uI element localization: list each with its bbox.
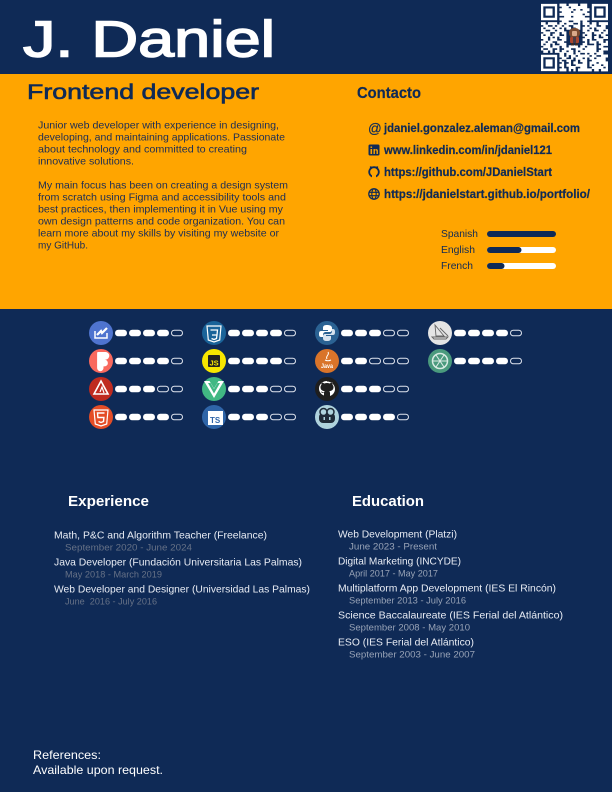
course 3: September 2013 - July 2016 xyxy=(349,596,466,606)
language: French: French xyxy=(441,260,473,272)
about text: best practices, then implementing it in Vue using my xyxy=(38,204,284,216)
education heading: Education xyxy=(352,494,424,510)
panel: education xyxy=(338,494,563,660)
skill: Java xyxy=(315,349,408,373)
panel: orange profile section xyxy=(0,74,612,309)
job title: Frontend developer xyxy=(27,81,259,104)
skill: GitHub xyxy=(315,377,408,401)
job 2 xyxy=(54,556,302,580)
skill: Java: Java xyxy=(321,364,334,370)
skill: JavaScript: JS xyxy=(210,358,219,368)
course 4 xyxy=(338,610,563,634)
references note: Available upon request. xyxy=(33,763,163,777)
course 3: Multiplatform App Development (IES El Rincón) xyxy=(338,582,556,594)
skill: Midjourney xyxy=(428,321,522,345)
about text: innovative solutions. xyxy=(38,156,134,168)
job 1: September 2020 - June 2024 xyxy=(65,542,192,554)
course 5: ESO (IES Ferial del Atlántico) xyxy=(338,636,474,648)
about text xyxy=(38,120,288,252)
references note: References: xyxy=(33,748,101,762)
job 3 xyxy=(54,584,310,608)
job 2: May 2018 - March 2019 xyxy=(65,570,162,580)
job 1 xyxy=(54,530,267,554)
contact list xyxy=(368,121,591,201)
about text: My main focus has been on creating a design system xyxy=(38,180,288,192)
about text: from scratch using Figma and accessibility tools and xyxy=(38,192,286,204)
skill: Python xyxy=(315,321,408,345)
panel: experience xyxy=(54,494,310,608)
skill: Angular-style xyxy=(89,377,182,401)
course 2 xyxy=(338,556,461,580)
name title: J. Daniel xyxy=(23,10,275,68)
skill: Figma xyxy=(89,349,182,373)
course 1 xyxy=(338,528,457,552)
skill: Excalidraw-style editor xyxy=(89,321,182,345)
language: English: English xyxy=(441,244,475,256)
about text: my GitHub. xyxy=(38,240,88,252)
course 1: Web Development (Platzi) xyxy=(338,528,457,540)
skill: TypeScript: TS xyxy=(210,416,221,425)
experience heading: Experience xyxy=(68,494,149,510)
references note xyxy=(33,748,163,777)
skill: GitHub Copilot xyxy=(315,405,408,429)
about text: developing, and maintaining applications. Passionate xyxy=(38,132,285,144)
skill: Vue xyxy=(202,377,296,401)
course 2: Digital Marketing (INCYDE) xyxy=(338,556,461,568)
panel: skills grid xyxy=(89,321,522,429)
job 2: Java Developer (Fundación Universitaria Las Palmas) xyxy=(54,556,302,568)
language: Spanish: Spanish xyxy=(441,228,478,240)
skill: HTML5 xyxy=(89,405,182,429)
QR code xyxy=(541,5,608,70)
about text: learn more about my skills by visiting my website or xyxy=(38,228,280,240)
skill: TypeScript xyxy=(202,405,296,429)
contact: linkedin: www.linkedin.com/in/jdaniel121 xyxy=(383,145,553,157)
job 3: June 2016 - July 2016 xyxy=(65,596,157,608)
about text: Junior web developer with experience in designing, xyxy=(38,120,279,132)
skill: CSS3 xyxy=(202,321,296,345)
about text: own design patterns and code organization. You can xyxy=(38,216,285,228)
contact heading: Contacto xyxy=(357,85,421,102)
skill: JavaScript xyxy=(202,349,296,373)
contact: email: jdaniel.gonzalez.aleman@gmail.com xyxy=(383,123,580,135)
course 1: June 2023 - Present xyxy=(349,542,437,552)
course 5 xyxy=(338,636,475,660)
course 3 xyxy=(338,582,556,606)
language bars xyxy=(441,228,556,272)
job 3: Web Developer and Designer (Universidad Las Palmas) xyxy=(54,584,310,596)
contact: email: @ xyxy=(368,121,382,136)
course 4: September 2008 - May 2010 xyxy=(349,622,470,634)
contact: portfolio: https://jdanielstart.github.io/portfolio/ xyxy=(384,189,591,201)
course 4: Science Baccalaureate (IES Ferial del Atlántico) xyxy=(338,610,563,622)
course 5: September 2003 - June 2007 xyxy=(349,650,475,660)
skill: ChatGPT xyxy=(428,349,522,373)
icon: avatar xyxy=(569,28,580,46)
job 1: Math, P&C and Algorithm Teacher (Freelance) xyxy=(54,530,267,542)
contact: github: https://github.com/JDanielStart xyxy=(384,167,552,179)
course 2: April 2017 - May 2017 xyxy=(349,568,438,580)
about text: about technology and committed to creating xyxy=(38,144,247,156)
